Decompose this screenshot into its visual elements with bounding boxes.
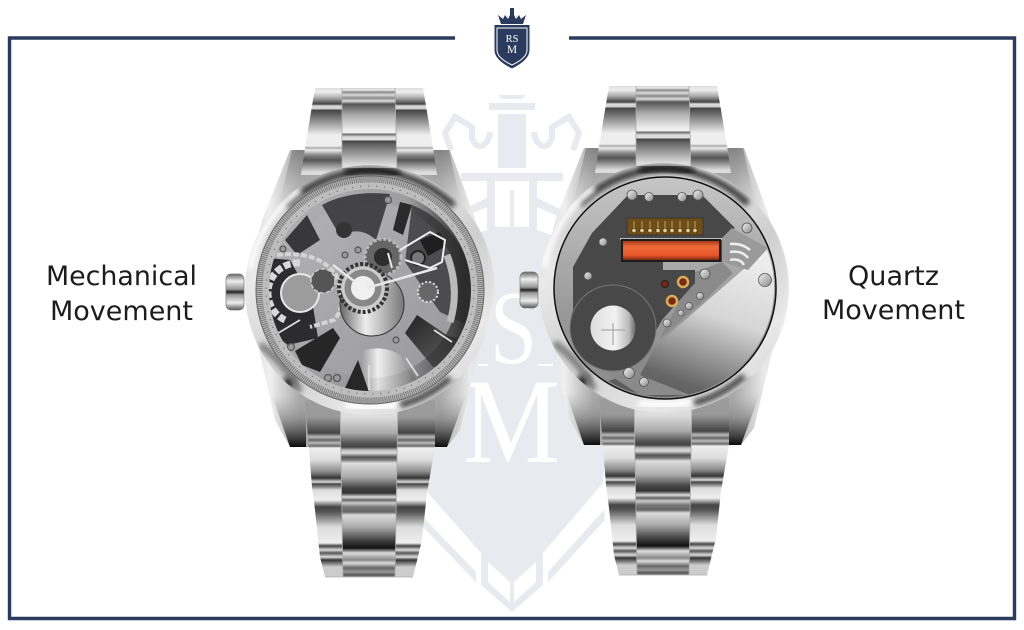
dark main plate	[570, 195, 735, 330]
logo monogram: RS	[506, 34, 519, 45]
grey band	[605, 262, 733, 395]
logo: crest	[494, 8, 530, 68]
watch: quartz	[520, 86, 793, 575]
diagonal silver plate	[608, 249, 774, 397]
logo crown	[498, 8, 526, 24]
tourbillon	[281, 274, 319, 312]
skeleton windows	[295, 328, 340, 372]
label: quartz movement: Movement	[822, 295, 965, 326]
label: mechanical movement: Mechanical	[46, 261, 197, 292]
logo: crest: M	[507, 44, 517, 56]
label: quartz movement: Quartz	[848, 261, 939, 292]
watermark: crest shield	[420, 95, 610, 612]
logo shield	[494, 25, 530, 68]
hands	[333, 253, 437, 288]
quartz case back	[554, 177, 790, 400]
watch: mechanical	[226, 88, 499, 577]
battery	[590, 306, 636, 350]
screws	[280, 196, 399, 382]
screws	[584, 190, 772, 386]
gears	[340, 272, 404, 336]
watermark letter S: S	[490, 269, 537, 386]
gold contacts	[662, 277, 688, 306]
mechanical dial	[256, 176, 484, 404]
watermark letter M: M	[463, 355, 560, 489]
orange bar	[620, 238, 722, 262]
connector strip	[627, 218, 703, 235]
label: mechanical movement: Movement	[50, 296, 193, 327]
